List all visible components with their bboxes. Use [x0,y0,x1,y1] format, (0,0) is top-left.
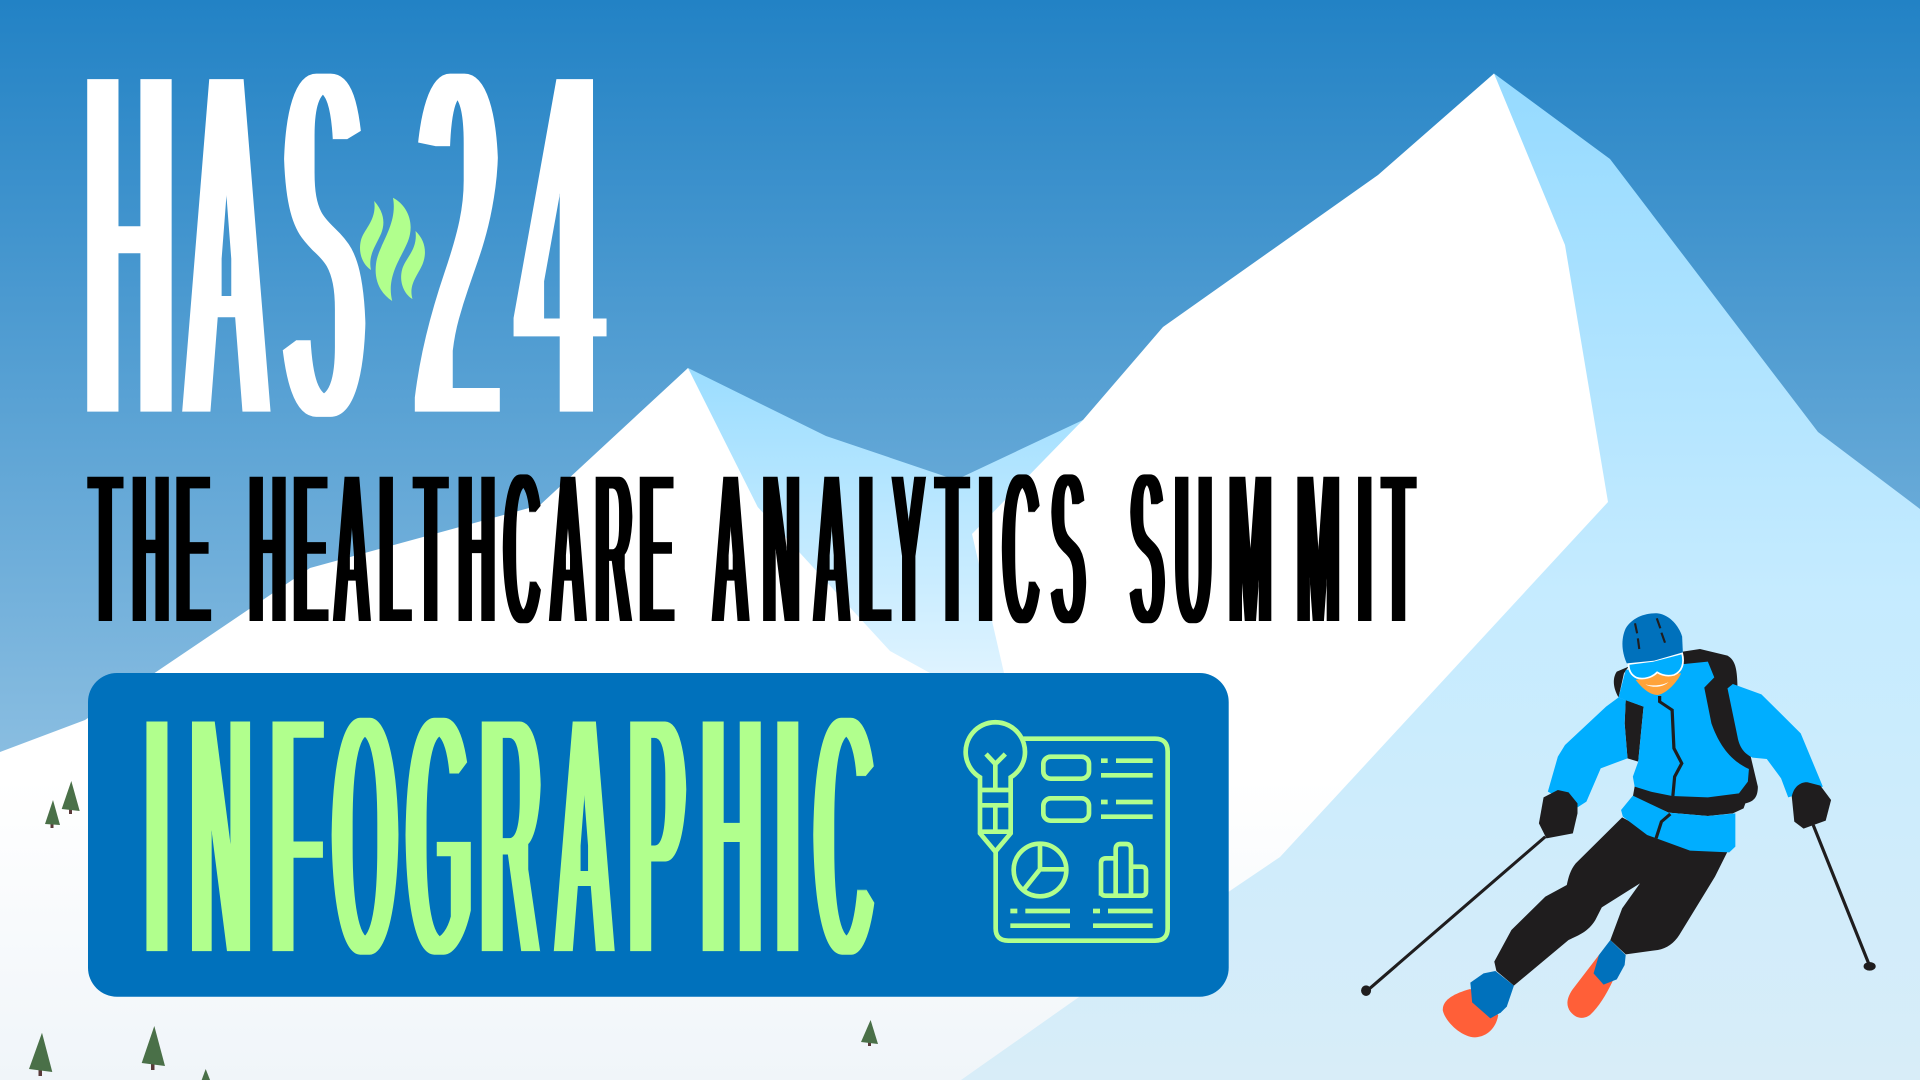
goggles [1629,653,1683,679]
icon: lightbulb pencil and report [966,722,1168,941]
logo: green flames [360,198,425,301]
trousers [1494,817,1727,986]
ski poles [1361,825,1876,996]
backpack [1614,649,1758,816]
snow covered mountains [0,74,1608,1080]
small mountain shaded face [688,368,1083,700]
helmet vents [1635,618,1665,649]
smile [1645,682,1669,687]
panel: infographic banner [88,673,1229,997]
skis [1443,955,1613,1037]
banner heading: Infographic: INFOGRAPHIC [145,628,875,1042]
big mountain shaded face [900,74,1920,1080]
gloves [1539,782,1831,838]
jacket [1548,662,1823,852]
ski boots [1470,940,1626,1018]
face [1636,673,1681,695]
subtitle: The Healthcare Analytics Summit: THE HEALTHCARE ANALYTICS SUMMIT [90,421,1414,678]
title: HAS 24 [86,0,601,545]
helmet [1622,613,1683,663]
pine trees [29,781,878,1080]
jacket zipper [1656,696,1682,838]
illustration: skier [1361,613,1876,1037]
